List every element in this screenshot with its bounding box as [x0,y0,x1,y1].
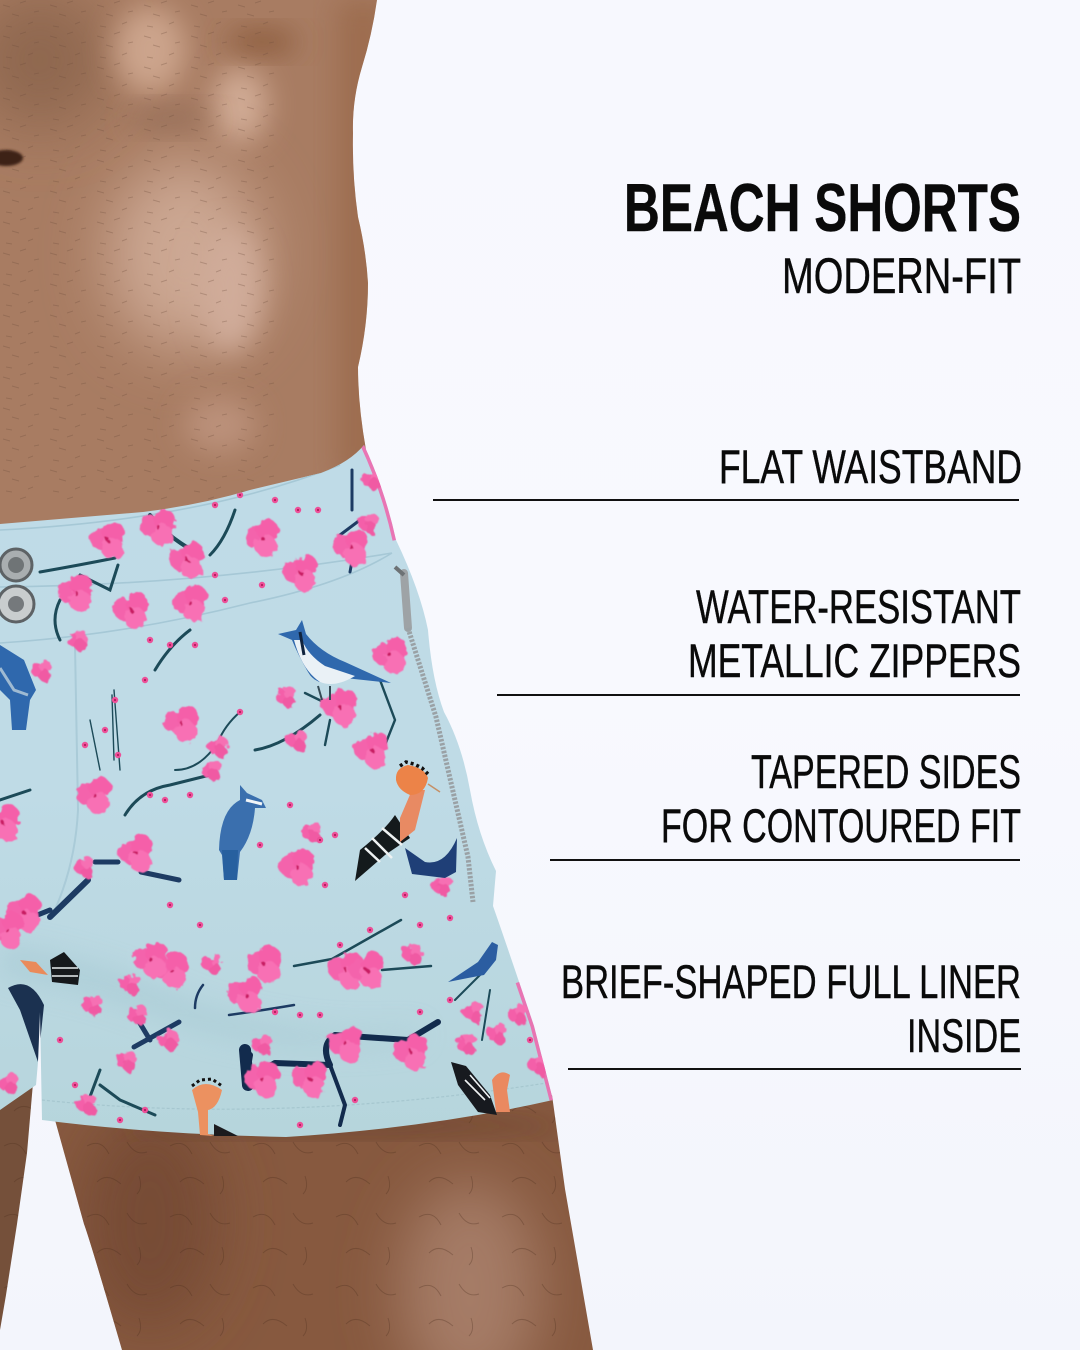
bird: blue jay upper right [278,620,391,700]
hem seam [42,1082,553,1109]
torso [0,0,400,540]
right thigh [40,1090,610,1350]
shorts [0,445,553,1137]
crotch shadow [8,984,44,1062]
fabric crease shading [11,954,169,1007]
feature: metallic zippers [497,580,1021,696]
bird: dark tail [405,838,457,878]
bird: blue jay centre [219,785,266,880]
bird: lower right hoopoe [451,1062,510,1115]
branches [0,470,490,1115]
icon: navel [0,150,23,166]
feature: full liner: INSIDE [907,1009,1021,1062]
bird: hoopoe [355,762,440,881]
bird: lower right jay [448,942,498,982]
feature: tapered sides [550,745,1021,861]
bird: left edge jay [0,645,36,730]
waistband seams [0,465,392,643]
large blossoms [0,470,548,1115]
bird: bottom hoopoe [192,1079,238,1136]
bird: black and white tail [20,952,80,985]
feature: full liner [561,955,1021,1070]
zipper [395,567,473,902]
small buds [57,492,533,1128]
pink side edge [364,445,553,1100]
metal buttons [0,549,34,622]
fly seam [50,645,78,920]
dark bough [245,1022,438,1125]
left thigh [0,1083,33,1330]
